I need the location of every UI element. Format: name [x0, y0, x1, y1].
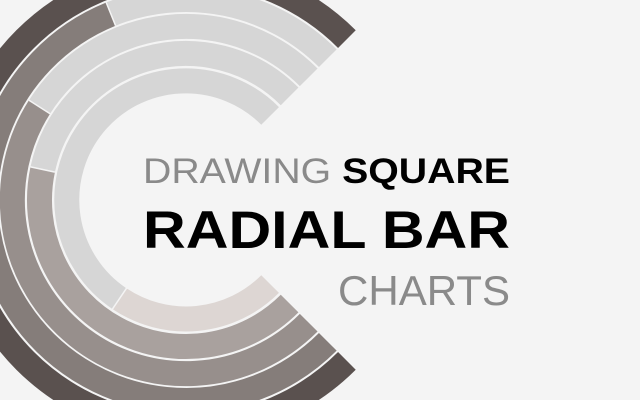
ring 2 — [39, 53, 290, 347]
ring 1 inner — [67, 81, 270, 319]
title line 1: DRAWING SQUARE — [143, 152, 510, 191]
ring 5 outer — [0, 0, 347, 400]
radial bar chart — [0, 0, 347, 400]
ring 3 — [12, 26, 309, 374]
title line 2: RADIAL BAR — [143, 201, 510, 260]
title line 3: CHARTS — [338, 267, 510, 314]
ring 4 — [0, 0, 328, 400]
title — [143, 152, 510, 314]
